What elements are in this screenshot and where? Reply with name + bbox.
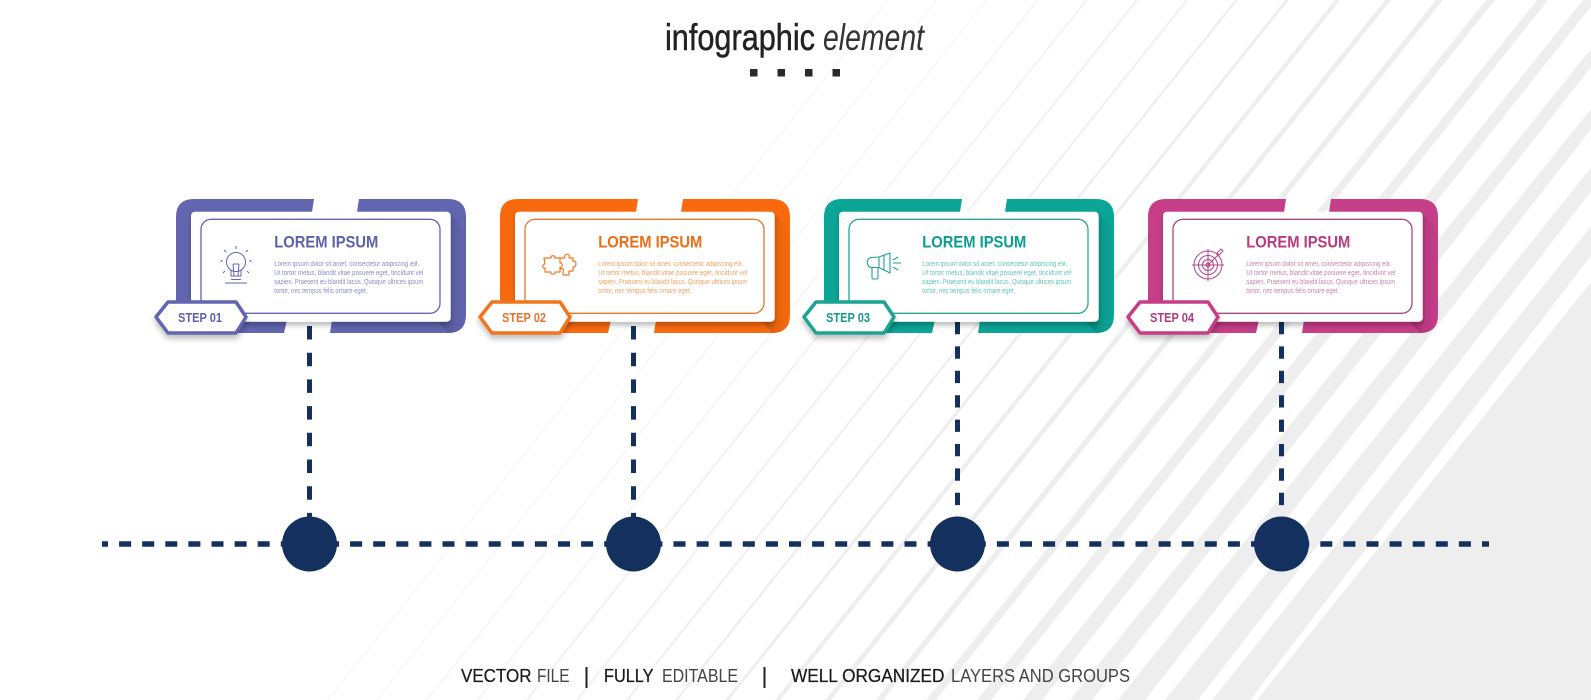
inner outline (525, 219, 764, 313)
white card (515, 212, 775, 322)
footer caption: EDITABLE (662, 666, 738, 686)
frame left piece (500, 199, 638, 333)
step badge: STEP 03 (826, 311, 870, 325)
connector step 04 (1279, 322, 1284, 518)
footer caption: WELL ORGANIZED (791, 666, 944, 686)
footer caption: VECTOR (461, 666, 532, 686)
body text: Ut tortor metus, blandit vitae posuere eget, tincidunt vel (922, 270, 1072, 277)
frame right piece (330, 199, 466, 333)
frame left piece (824, 199, 962, 333)
step badge (804, 302, 894, 333)
body text: tortor, nec tempus felis ornare eget. (274, 288, 367, 295)
frame left piece (1148, 199, 1286, 333)
heading: LOREM IPSUM (1246, 232, 1350, 252)
title: infographic (665, 17, 815, 58)
frame right piece (654, 199, 790, 333)
inner outline (1173, 219, 1412, 313)
body text (598, 261, 748, 295)
body text: Ut tortor metus, blandit vitae posuere eget, tincidunt vel (274, 270, 424, 277)
icon: target (1192, 249, 1224, 281)
body text: Lorem ipsum dolor sit amet, consectetur adipiscing elit. (598, 261, 743, 268)
timeline node 1 (282, 516, 337, 572)
body text: Lorem ipsum dolor sit amet, consectetur adipiscing elit. (1246, 261, 1391, 268)
footer caption (461, 666, 1130, 688)
timeline horizontal dashed line (102, 541, 1489, 547)
body text: Lorem ipsum dolor sit amet, consectetur adipiscing elit. (274, 261, 419, 268)
panel: step 03 (804, 199, 1114, 333)
inner outline (201, 219, 440, 313)
white card (839, 212, 1099, 322)
step badge: STEP 02 (502, 311, 546, 325)
step badge (156, 302, 246, 333)
white card (1163, 212, 1423, 322)
footer caption: FULLY (604, 666, 654, 686)
body text: sapien. Praesent eu blandit lacus. Quisque ultrices ipsum (1246, 279, 1395, 286)
icon: megaphone (867, 253, 901, 279)
body text: sapien. Praesent eu blandit lacus. Quisque ultrices ipsum (598, 279, 747, 286)
footer caption: LAYERS AND GROUPS (951, 666, 1130, 686)
background diagonal stripes (327, 0, 1591, 700)
timeline node 3 (930, 516, 985, 572)
timeline node 2 (606, 516, 661, 572)
body text: sapien. Praesent eu blandit lacus. Quisque ultrices ipsum (274, 279, 423, 286)
body text: tortor, nec tempus felis ornare eget. (1246, 288, 1339, 295)
body text: Ut tortor metus, blandit vitae posuere eget, tincidunt vel (598, 270, 748, 277)
body text (1246, 261, 1396, 295)
timeline node 4 (1254, 516, 1309, 572)
heading: LOREM IPSUM (922, 232, 1026, 252)
inner outline (849, 219, 1088, 313)
step badge (1128, 302, 1218, 333)
icon: puzzle pieces (543, 254, 576, 275)
step badge: STEP 01 (178, 311, 222, 325)
connector step 02 (631, 326, 636, 518)
footer caption: FILE (537, 666, 570, 686)
body text: sapien. Praesent eu blandit lacus. Quisque ultrices ipsum (922, 279, 1071, 286)
icon: light bulb (220, 246, 252, 283)
body text (922, 261, 1072, 295)
connector step 01 (307, 326, 312, 518)
frame right piece (978, 199, 1114, 333)
step badge: STEP 04 (1150, 311, 1194, 325)
body text: Ut tortor metus, blandit vitae posuere eget, tincidunt vel (1246, 270, 1396, 277)
body text: Lorem ipsum dolor sit amet, consectetur adipiscing elit. (922, 261, 1067, 268)
body text: tortor, nec tempus felis ornare eget. (922, 288, 1015, 295)
heading: LOREM IPSUM (598, 232, 702, 252)
step badge (480, 302, 570, 333)
frame left piece (176, 199, 314, 333)
heading: LOREM IPSUM (274, 232, 378, 252)
panel: step 04 (1128, 199, 1438, 333)
title dots (750, 69, 840, 76)
body text: tortor, nec tempus felis ornare eget. (598, 288, 691, 295)
white card (191, 212, 451, 322)
body text (274, 261, 424, 295)
connector step 03 (955, 322, 960, 518)
panel: step 01 (156, 199, 466, 333)
title: element (823, 17, 925, 58)
panel: step 02 (480, 199, 790, 333)
title (665, 17, 925, 58)
frame right piece (1302, 199, 1438, 333)
